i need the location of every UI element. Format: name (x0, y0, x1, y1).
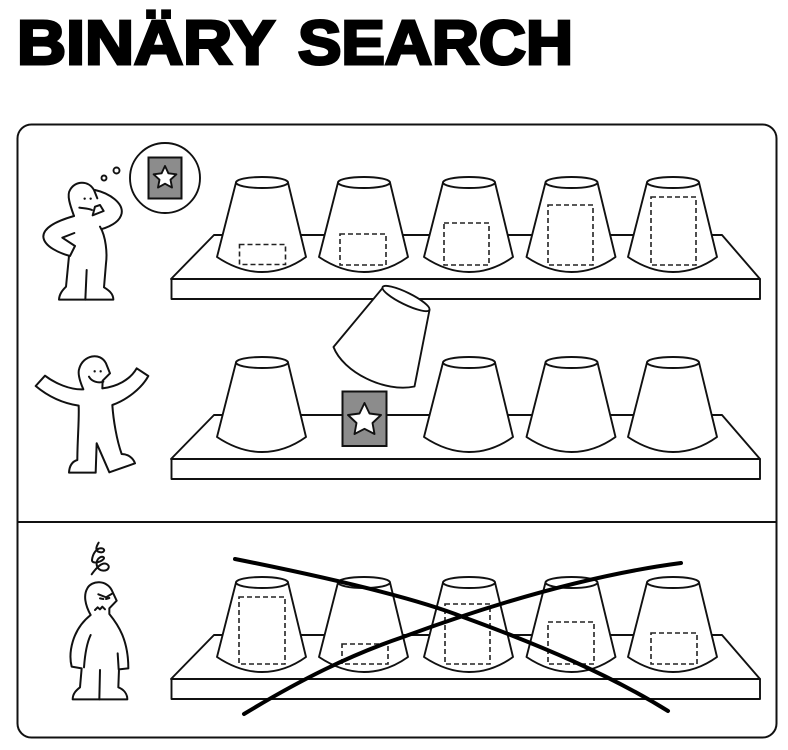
title (17, 9, 573, 78)
figure: happy person (36, 356, 148, 473)
cups row 3 with dashed hints (217, 577, 717, 672)
divider between right and wrong way (18, 521, 776, 523)
title: BINÄRY (17, 9, 275, 78)
cross-out strokes (235, 559, 681, 714)
thought dots (102, 168, 120, 180)
cups row 1 with growing dashed hints (217, 177, 717, 272)
panel: instructions frame (18, 124, 776, 738)
title: SEARCH (298, 9, 573, 78)
shelf row 2 (171, 415, 760, 479)
figure: thinking person (43, 183, 122, 300)
star card revealed (342, 392, 386, 446)
figure: frustrated person (71, 582, 128, 699)
thought bubble with star card (130, 143, 200, 213)
shelf row 3 (171, 635, 760, 699)
cups row 2 (217, 357, 717, 452)
icon: frustration spring (92, 543, 109, 574)
lifted cup (334, 282, 432, 388)
shelf row 1 (171, 235, 760, 299)
